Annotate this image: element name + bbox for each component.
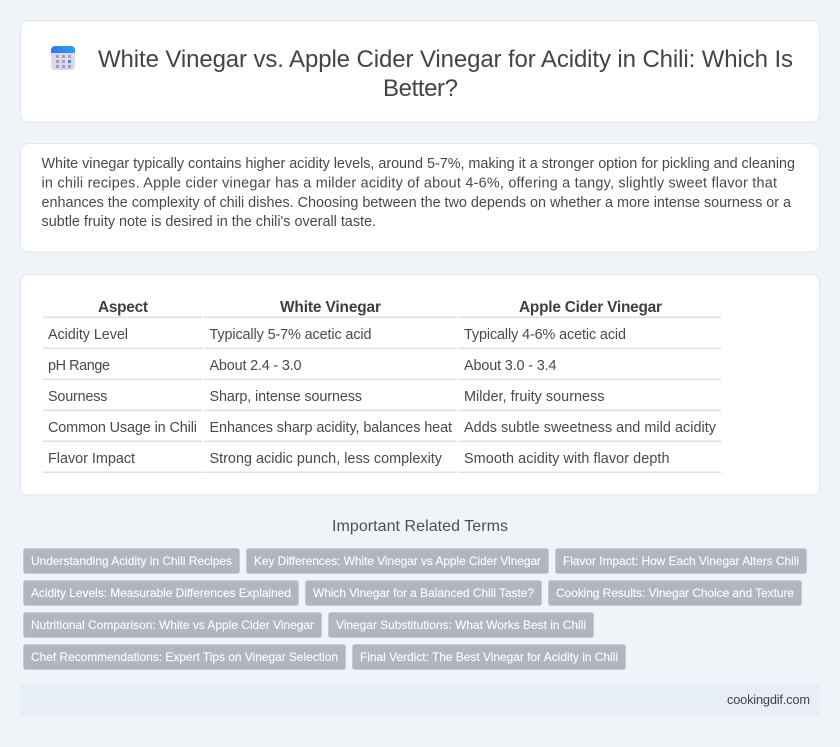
tag: Acidity Levels: Measurable Differences Explained	[31, 586, 291, 600]
table row: pH range: About 3.0 - 3.4	[464, 358, 556, 374]
table row: sourness: Milder, fruity sourness	[464, 389, 604, 405]
table row: acidity level: Acidity Level	[48, 327, 128, 343]
tag: Which Vinegar for a Balanced Chili Taste?	[313, 586, 534, 600]
tag: Chef Recommendations: Expert Tips on Vinegar Selection	[31, 650, 338, 664]
table row: pH range: pH Range	[48, 358, 110, 374]
footer	[20, 683, 820, 717]
tag: Final Verdict: The Best Vinegar for Acidity in Chili	[360, 650, 618, 664]
panel: summary text	[20, 144, 820, 252]
table row: flavor impact: Strong acidic punch, less complexity	[210, 451, 443, 467]
tag: Flavor Impact: How Each Vinegar Alters Chili	[563, 554, 799, 568]
tag	[352, 644, 626, 670]
tag	[24, 580, 298, 606]
tag: Understanding Acidity in Chili Recipes	[31, 554, 232, 568]
table row: pH range: About 2.4 - 3.0	[210, 358, 302, 374]
tag: Vinegar Substitutions: What Works Best in Chili	[336, 618, 586, 632]
table row: flavor impact: Smooth acidity with flavor depth	[464, 451, 670, 467]
title: White Vinegar vs. Apple Cider Vinegar for Acidity in Chili: Which Is	[98, 46, 793, 73]
panel: summary text: White vinegar typically contains higher acidity levels, around 5-7%, making it a stronger option for pickling and cleaning	[42, 156, 795, 172]
tag: Key Differences: White Vinegar vs Apple Cider Vinegar	[254, 554, 541, 568]
tag	[24, 548, 240, 574]
table row: common usage	[43, 420, 721, 442]
tag list	[24, 548, 806, 670]
table row: sourness: Sourness	[48, 389, 108, 405]
table header: Aspect	[98, 299, 148, 316]
tag: Nutritional Comparison: White vs Apple Cider Vinegar	[31, 618, 314, 632]
table row: flavor impact	[43, 451, 721, 473]
table header: Apple Cider Vinegar	[519, 299, 662, 316]
table row: flavor impact: Flavor Impact	[48, 451, 135, 467]
table header	[43, 299, 721, 318]
panel: summary text: subtle fruity note is desired in the chili's overall taste.	[42, 214, 376, 230]
heading: related terms: Important Related Terms	[332, 518, 508, 535]
panel: comparison table	[20, 274, 820, 495]
tag: Cooking Results: Vinegar Choice and Texture	[556, 586, 794, 600]
tag	[246, 548, 548, 574]
table row: pH range	[43, 358, 721, 380]
tag	[24, 644, 346, 670]
table row: common usage: Common Usage in Chili	[48, 420, 197, 436]
title	[98, 46, 793, 102]
table row: acidity level: Typically 5-7% acetic acid	[210, 327, 372, 343]
tag	[556, 548, 806, 574]
title: Better?	[383, 75, 458, 102]
tag	[306, 580, 542, 606]
table row: common usage: Adds subtle sweetness and mild acidity	[464, 420, 717, 436]
table row: sourness: Sharp, intense sourness	[210, 389, 362, 405]
table row: sourness	[43, 389, 721, 411]
panel: title card	[20, 20, 820, 122]
icon: calendar	[51, 46, 75, 70]
panel: summary text: in chili recipes. Apple cider vinegar has a milder acidity of about 4-6%, offering a tangy, slightly sweet flavor that	[42, 176, 777, 192]
tag	[548, 580, 802, 606]
table row: acidity level: Typically 4-6% acetic acid	[464, 327, 626, 343]
tag	[328, 612, 594, 638]
footer: cookingdif.com	[727, 692, 810, 707]
panel: summary text: enhances the complexity of chili dishes. Choosing between the two depends on whether a more intense sourness or a	[42, 195, 791, 211]
table header: White Vinegar	[280, 299, 381, 316]
tag	[24, 612, 322, 638]
table row: common usage: Enhances sharp acidity, balances heat	[210, 420, 452, 436]
table row: acidity level	[43, 327, 721, 349]
